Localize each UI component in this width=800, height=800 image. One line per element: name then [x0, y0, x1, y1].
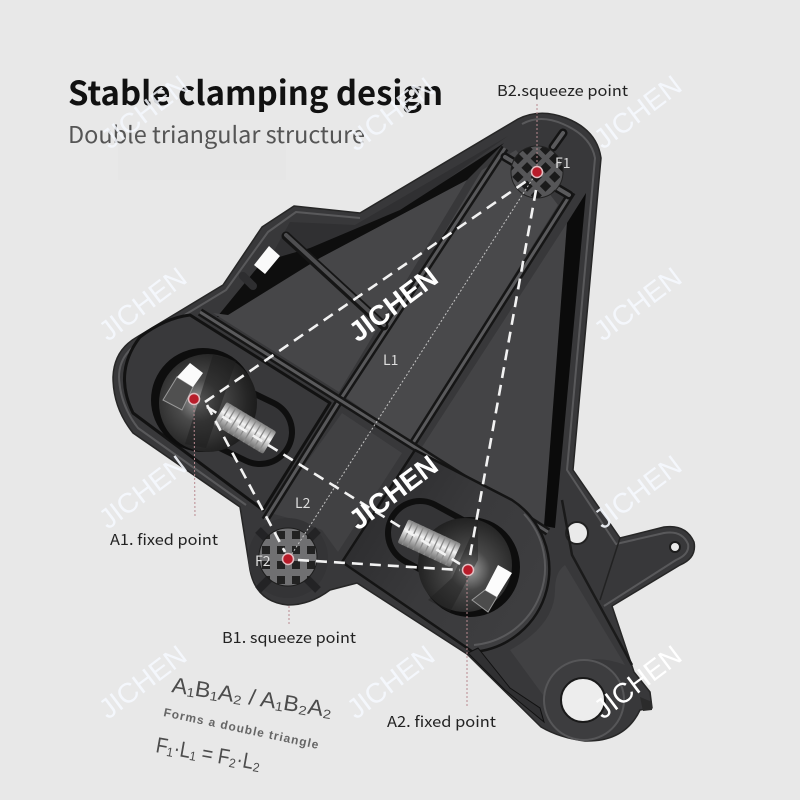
A1 capsule: [124, 315, 330, 510]
watermarks: JICHEN: [588, 639, 687, 725]
thin dotted line L: [288, 172, 537, 560]
A1 slot floor: [225, 415, 260, 432]
watermarks: JICHEN: [93, 261, 192, 347]
watermarks: JICHEN: [343, 261, 444, 348]
tab fold line: [600, 538, 620, 600]
watermarks: JICHEN: [588, 69, 687, 155]
watermarks: JICHEN: [588, 449, 687, 535]
watermarks: JICHEN: [341, 639, 440, 725]
rim highlight: [119, 119, 688, 606]
handwritten formulas: [154, 672, 334, 775]
A1 bolt thread: [213, 402, 276, 454]
watermarks: JICHEN: [93, 449, 192, 535]
force and length labels: L2: [295, 493, 311, 513]
A2 nut: [472, 565, 512, 612]
red point markers: [188, 166, 542, 576]
A2 recess: [420, 517, 520, 617]
dashed triangle lines: [205, 178, 536, 570]
force and length labels: L1: [383, 350, 398, 370]
F2 recess: [248, 518, 328, 598]
callout labels: B2.squeeze point: [497, 80, 628, 101]
F1 mesh pad: [505, 133, 569, 198]
diagonal rib lower right: [562, 500, 632, 665]
A2 capsule: [342, 450, 549, 652]
A2 rim highlight: [474, 514, 545, 645]
lower middle panel: [270, 413, 402, 552]
thin internal strut: [286, 236, 384, 326]
watermarks: JICHEN: [95, 69, 194, 155]
A2 slot floor: [420, 533, 455, 552]
F2 mesh pad: [258, 528, 318, 590]
hole beside tab: [566, 522, 588, 544]
A1 recess: [151, 348, 255, 452]
force and length labels: F2: [255, 551, 271, 571]
upper sliver under top rim: [268, 136, 508, 262]
watermarks: JICHEN: [343, 449, 444, 536]
A1 ball washer: [159, 354, 257, 452]
A1 nut: [163, 363, 203, 410]
bottom ring: [544, 660, 624, 740]
leader lines: [194, 104, 537, 708]
callout labels: B1. squeeze point: [222, 627, 356, 648]
main upper-left panel: [213, 180, 467, 392]
formula: lever balance: F₁·L₁ = F₂·L₂: [154, 732, 263, 775]
lower right triangular panel: [510, 565, 625, 695]
centre channel panel: [345, 150, 558, 442]
A2 ball washer: [418, 518, 512, 612]
callout labels: [110, 80, 628, 732]
force and length labels: [255, 153, 570, 571]
force and length labels: F1: [555, 153, 570, 173]
white clip window: [254, 246, 280, 274]
cross rib: [200, 312, 548, 532]
watermarks: JICHEN: [93, 639, 192, 725]
formula: triangles: A₁B₁A₂ / A₁B₂A₂: [170, 672, 334, 722]
callout labels: A1. fixed point: [110, 529, 218, 550]
A2 bolt thread: [398, 519, 461, 567]
watermarks: JICHEN: [588, 261, 687, 347]
rib 2 from top: [413, 192, 572, 443]
black channel on right: [544, 193, 586, 528]
A2 slot ring: [420, 533, 455, 552]
lower edge strip: [468, 648, 544, 722]
bottom pointed tip: [640, 697, 652, 711]
caption: double triangle: Forms a double triangle: [162, 705, 320, 752]
rib 1 from top to F2: [265, 148, 505, 520]
bracket body: [113, 113, 694, 741]
clip peg: [243, 276, 253, 286]
bracket outer silhouette: [113, 113, 694, 741]
black band above main panel: [217, 143, 504, 317]
watermarks: JICHEN: [341, 71, 440, 157]
A1 slot ring: [225, 415, 260, 432]
right grey panel: [422, 223, 567, 525]
watermarks: [93, 69, 687, 725]
callout labels: A2. fixed point: [387, 711, 496, 732]
title: Stable clamping design: [68, 67, 443, 115]
small tab hole: [670, 542, 680, 552]
subtitle: Double triangular structure: [68, 116, 365, 150]
